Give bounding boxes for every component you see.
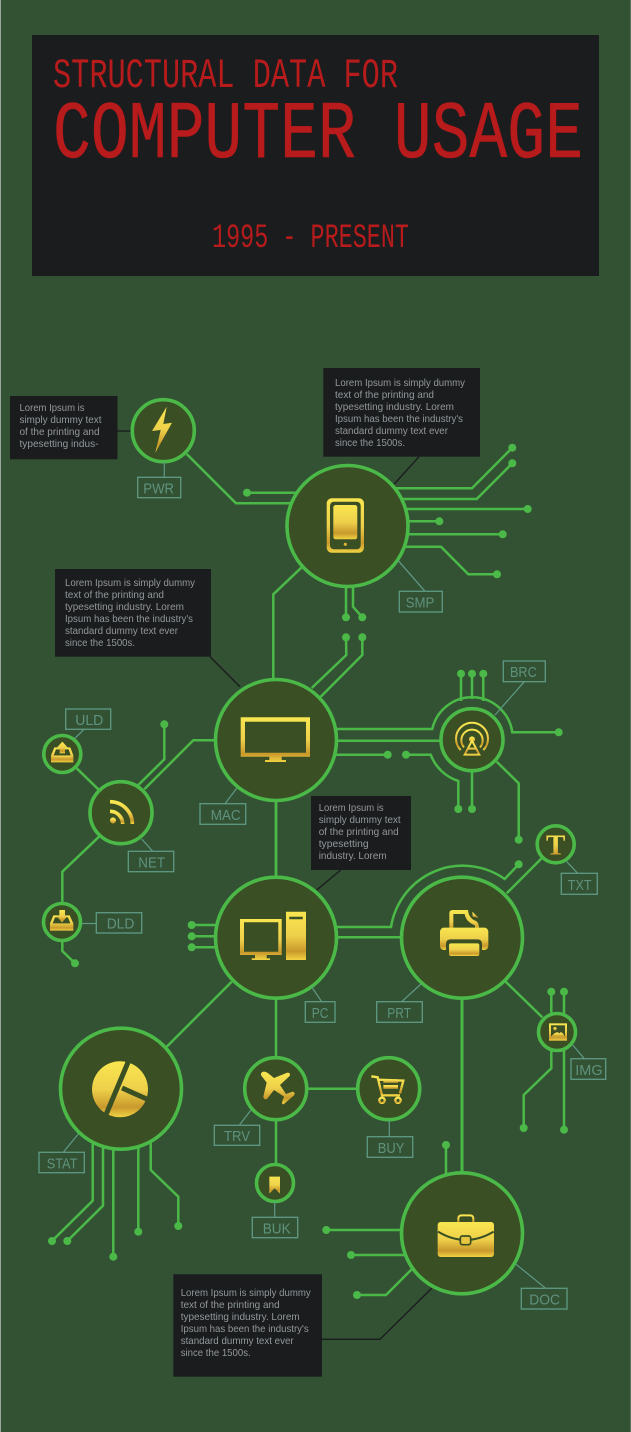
tag: BUY (367, 1120, 413, 1157)
tag: MAC: MAC (211, 807, 241, 824)
tag: DOC: DOC (529, 1292, 560, 1308)
callout: documents: text of the printing and (181, 1299, 280, 1311)
icon: desktop and tower (240, 912, 306, 960)
tag: TRV: TRV (224, 1128, 250, 1145)
icon: download tray (50, 910, 73, 931)
tag: ULD (66, 709, 111, 738)
callout: smartphone (323, 368, 480, 457)
callout: desktop monitor: since the 1500s. (65, 637, 135, 649)
callout: power: of the printing and (20, 426, 100, 438)
node: personal computer (216, 877, 336, 998)
tag: BRC (495, 661, 545, 715)
tag: PRT (377, 984, 422, 1022)
node: smartphone (287, 466, 408, 586)
tag: PWR (138, 462, 181, 498)
icon: smartphone (327, 498, 364, 553)
node: network (90, 782, 152, 844)
tag: DOC (516, 1264, 567, 1309)
callout: personal computer: of the printing and (319, 826, 399, 838)
callout: documents: standard dummy text ever (181, 1335, 294, 1347)
title panel (32, 35, 599, 276)
callout: documents (173, 1274, 322, 1377)
callout: desktop monitor: standard dummy text ever (65, 625, 178, 637)
tag: IMG (571, 1045, 606, 1079)
node: power (132, 400, 194, 462)
callout: smartphone: typesetting industry. Lorem (335, 401, 454, 413)
tag: ULD: ULD (75, 712, 103, 729)
tag: PWR: PWR (143, 480, 174, 497)
tag: NET: NET (138, 854, 165, 871)
icon: rss (110, 802, 132, 824)
node: travel (245, 1058, 307, 1120)
node: statistics (60, 1028, 182, 1149)
node: download (44, 904, 80, 940)
icon: monitor (241, 717, 310, 762)
callout: desktop monitor: Lorem Ipsum is simply dummy (65, 577, 196, 589)
icon: broadcast tower (456, 723, 488, 755)
node: documents (402, 1173, 522, 1294)
tag: PC (305, 987, 335, 1022)
circuit traces connecting the nodes (48, 444, 568, 1299)
callout: smartphone: text of the printing and (335, 389, 434, 401)
callout: personal computer: industry. Lorem (319, 850, 387, 862)
tag: TRV (214, 1110, 260, 1145)
node: shopping (358, 1058, 420, 1120)
callout: personal computer: Lorem Ipsum is (319, 802, 384, 814)
icon: airplane (261, 1072, 295, 1104)
tag: BUK: BUK (263, 1220, 291, 1237)
callout: personal computer: typesetting (319, 838, 369, 850)
tag: DLD (82, 913, 142, 933)
title line 1: STRUCTURAL DATA FOR (53, 52, 398, 100)
tag: NET (128, 839, 174, 872)
icon: printer (440, 910, 488, 956)
icon: bookmark (269, 1177, 280, 1193)
tag: MAC (200, 788, 246, 824)
tag: DLD: DLD (107, 916, 135, 933)
icon: shopping cart (371, 1076, 403, 1103)
icon: picture (549, 1023, 567, 1041)
tag: PRT: PRT (387, 1005, 411, 1022)
callout: desktop monitor (55, 569, 211, 657)
callout: power (10, 396, 118, 459)
callout: desktop monitor: text of the printing and (65, 589, 164, 601)
callout: desktop monitor: typesetting industry. Lorem (65, 601, 184, 613)
date range: 1995 - PRESENT (212, 220, 409, 258)
tag: IMG: IMG (575, 1062, 603, 1079)
callout: documents: Ipsum has been the industry's (181, 1323, 309, 1335)
icon: briefcase (438, 1215, 494, 1257)
tag: STAT: STAT (47, 1155, 77, 1172)
tag: BRC: BRC (510, 664, 537, 681)
tag: SMP (398, 561, 442, 612)
callout: personal computer (311, 796, 411, 870)
callout: personal computer: simply dummy text (319, 814, 401, 826)
callout: documents: typesetting industry. Lorem (181, 1311, 300, 1323)
tag: BUK (252, 1202, 298, 1238)
callout: desktop monitor: Ipsum has been the industry's (65, 613, 193, 625)
tag: TXT (561, 862, 597, 894)
node: desktop monitor (216, 680, 336, 800)
tag: TXT: TXT (568, 877, 592, 894)
node: broadcast (441, 709, 503, 771)
icon: upload tray (51, 742, 73, 762)
node: image (538, 1014, 576, 1050)
tag: BUY: BUY (378, 1140, 404, 1157)
icon: pie chart (92, 1060, 149, 1117)
callout: smartphone: standard dummy text ever (335, 425, 448, 437)
callout: power: Lorem Ipsum is (20, 402, 84, 414)
callout: documents: Lorem Ipsum is simply dummy (181, 1287, 311, 1299)
callout leader lines (117, 431, 432, 1339)
callout: smartphone: since the 1500s. (335, 437, 405, 449)
node: printer (402, 877, 522, 998)
callout: smartphone: Ipsum has been the industry's (335, 413, 463, 425)
icon: lightning bolt (152, 407, 172, 453)
icon: letter T: T (546, 829, 565, 861)
callout: smartphone: Lorem Ipsum is simply dummy (335, 377, 466, 389)
node: upload (44, 736, 81, 772)
callout: power: simply dummy text (20, 414, 102, 426)
callout: power: typesetting indus- (20, 438, 99, 450)
tag: SMP: SMP (406, 594, 434, 612)
callout: documents: since the 1500s. (181, 1347, 251, 1359)
tag: PC: PC (312, 1005, 329, 1022)
node: bookmark (256, 1164, 294, 1202)
node: text (537, 826, 574, 863)
tag: STAT (39, 1134, 84, 1173)
